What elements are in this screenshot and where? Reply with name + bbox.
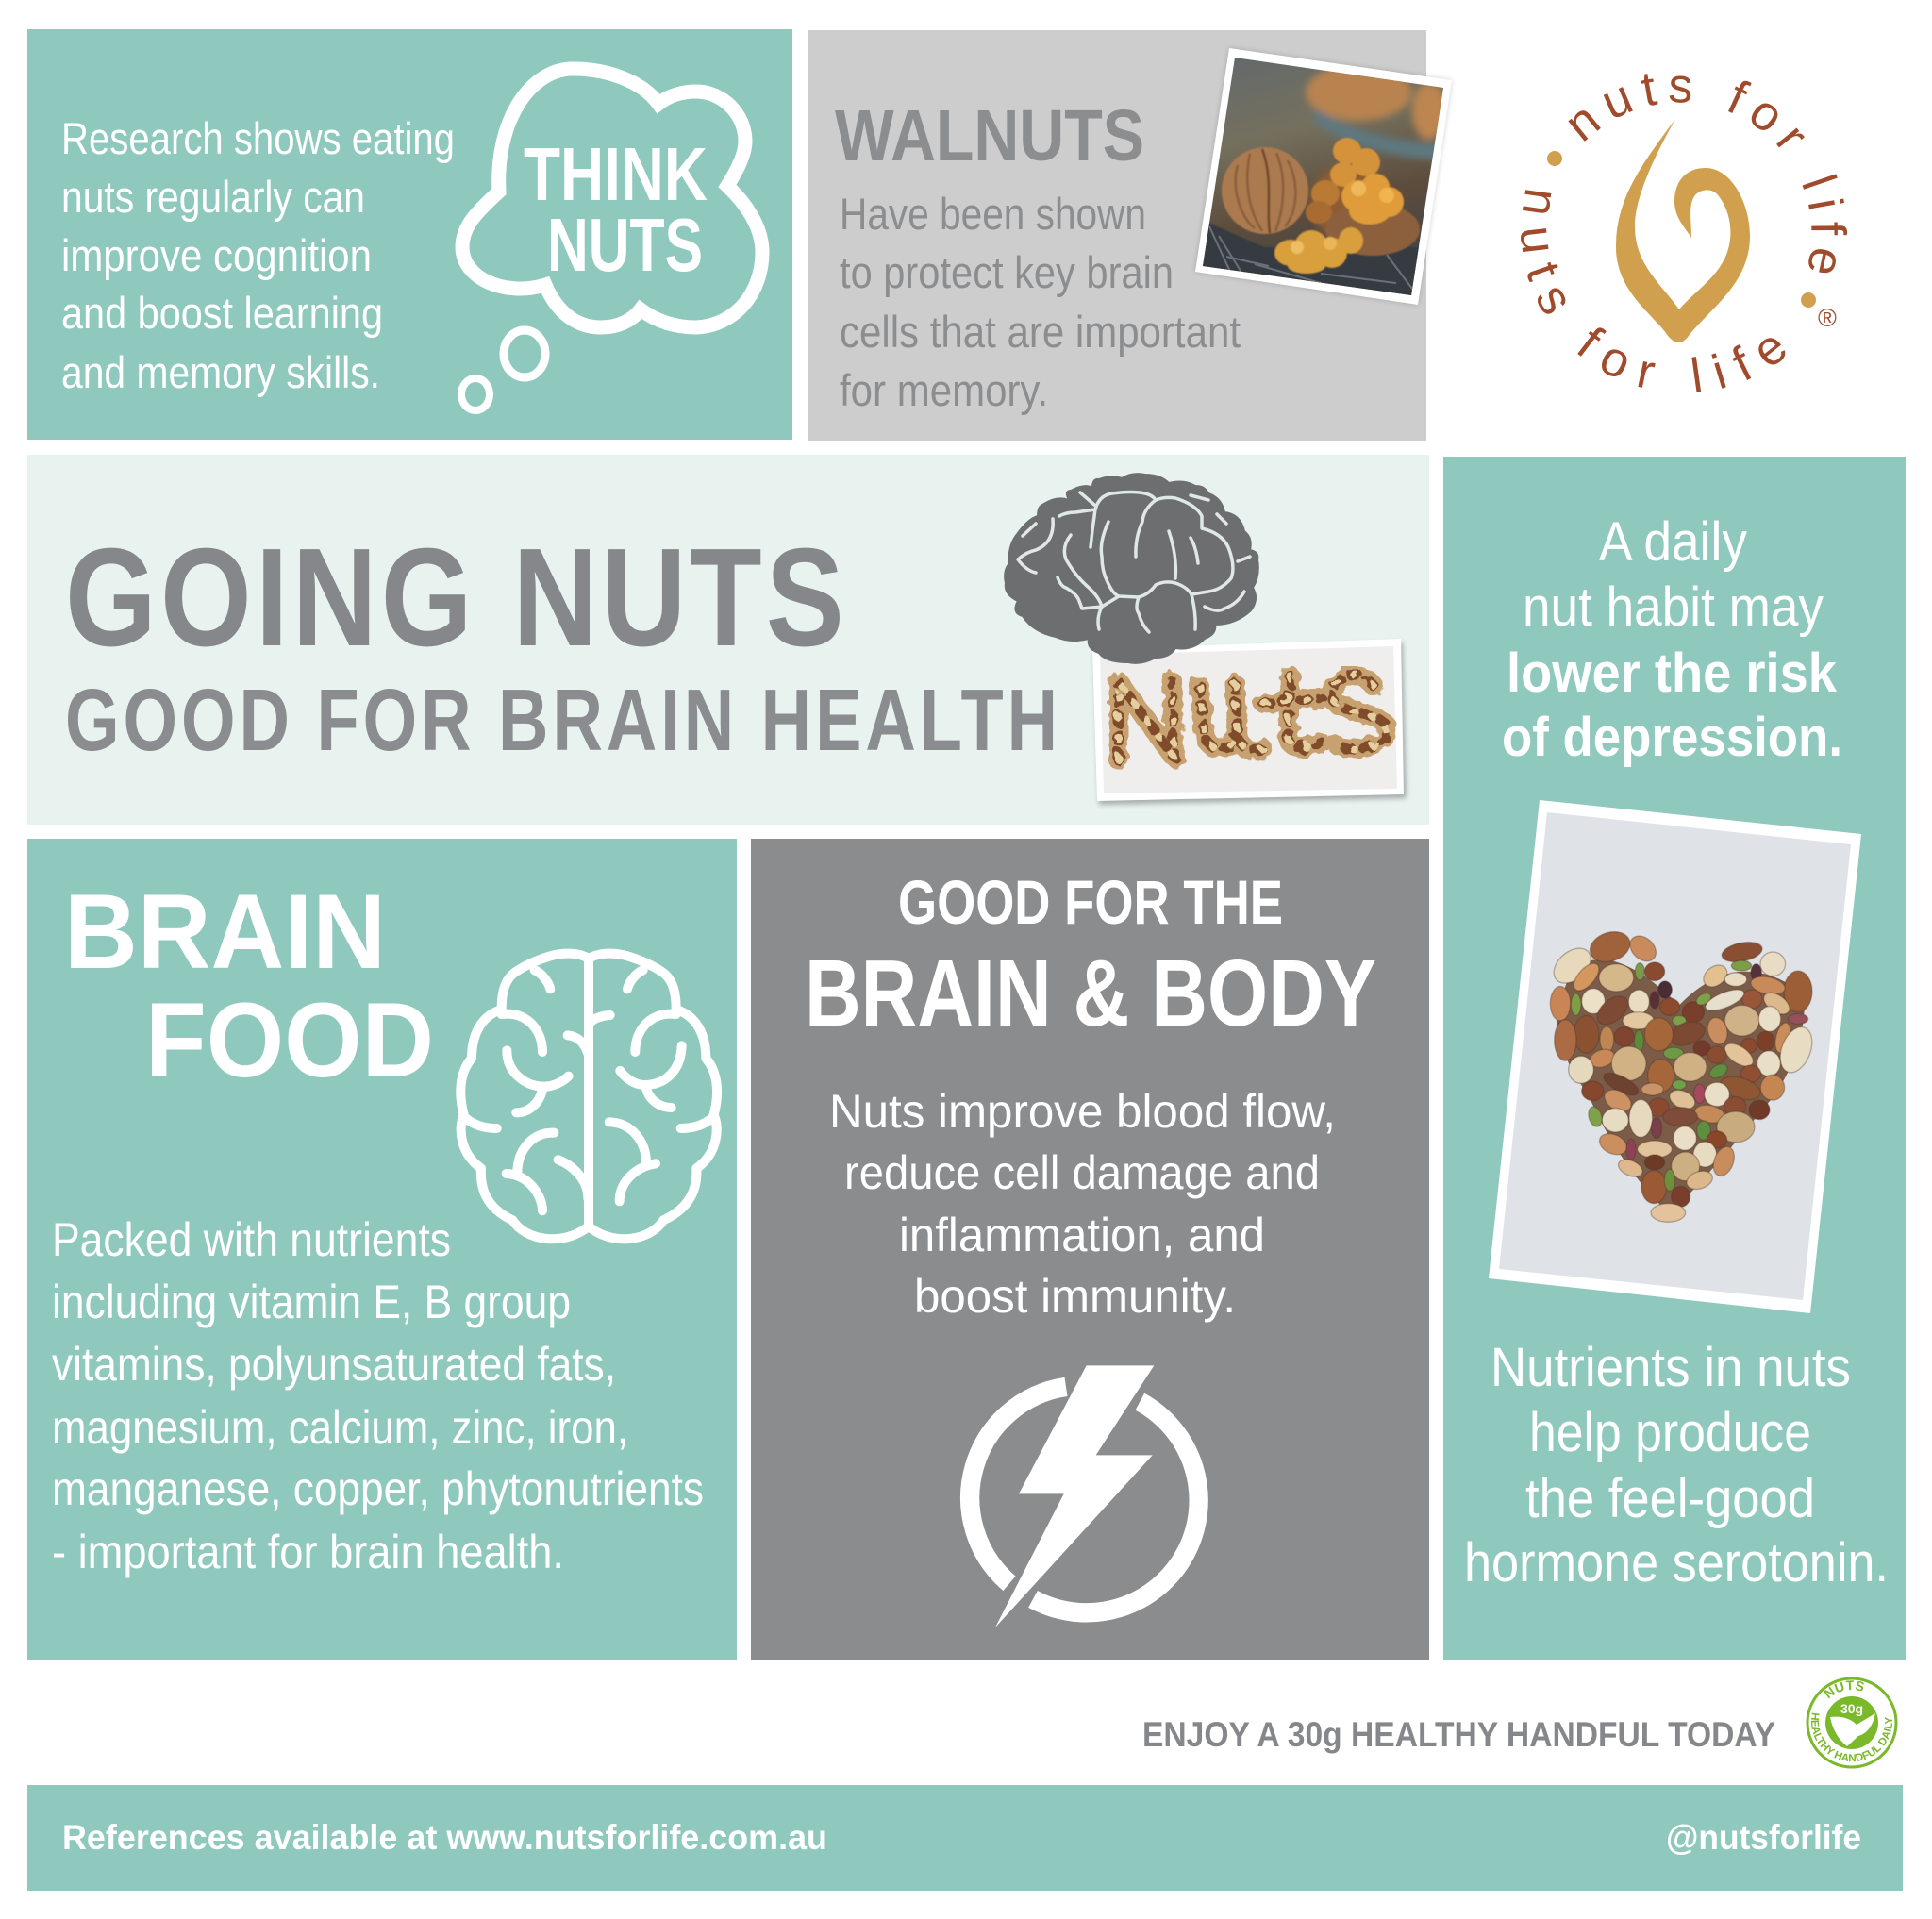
text: walnuts description: to protect key brain [840, 247, 1174, 297]
text: research summary: and memory skills. [61, 347, 380, 397]
text: walnuts description: for memory. [840, 365, 1048, 415]
text: lower the risk of depression: of depression. [1502, 707, 1842, 768]
text: serotonin: hormone serotonin. [1464, 1532, 1889, 1594]
text: lower the risk of depression: A daily [1599, 511, 1747, 573]
icon: thought cloud [461, 69, 762, 410]
heading: brain food [64, 873, 434, 1099]
subheading: good for brain health: GOOD FOR BRAIN HEALTH [65, 671, 1061, 769]
text: nutrient list: manganese, copper, phytonutrients [52, 1462, 704, 1515]
text: walnuts description: cells that are important [840, 307, 1241, 357]
logo dots [1547, 151, 1816, 308]
heading: brain and body: BRAIN & BODY [805, 941, 1376, 1046]
panel: walnuts [808, 30, 1462, 441]
heading: going nuts: GOING NUTS [65, 520, 848, 676]
text: nutrient list: - important for brain health. [52, 1526, 564, 1578]
text: nutrient list: Packed with nutrients [52, 1213, 451, 1266]
heading: think nuts: THINK [524, 132, 708, 216]
panel: think nuts [27, 29, 792, 440]
logo swirl [1616, 119, 1750, 342]
heading: brain food: FOOD [145, 981, 434, 1099]
photo: heart of mixed nuts [1489, 800, 1861, 1313]
text: research summary [61, 113, 455, 397]
text: research summary: and boost learning [61, 288, 383, 338]
badge: 30g healthy handful daily: 30g [1840, 1701, 1863, 1716]
heading: good for the: GOOD FOR THE [898, 867, 1283, 937]
icon: brain outline [460, 954, 717, 1239]
text: research summary: nuts regularly can [61, 172, 365, 222]
text: nutrient list: vitamins, polyunsaturated fats, [52, 1338, 616, 1391]
heading: walnuts: WALNUTS [835, 95, 1144, 176]
text: nutrient list: including vitamin E, B group [52, 1276, 571, 1328]
badge: 30g healthy handful daily: HEALTHY HANDFUL DAILY [1811, 1713, 1892, 1762]
panel: daily nut habit [1443, 457, 1906, 1660]
text: blood flow description [829, 1085, 1336, 1323]
text: research summary: improve cognition [61, 230, 372, 280]
logo: nuts for life [1521, 74, 1847, 392]
text: walnuts description: Have been shown [840, 189, 1146, 239]
heading: think nuts [524, 132, 708, 287]
footer: references: References available at www.nutsforlife.com.au [62, 1818, 827, 1857]
text: serotonin: help produce [1529, 1402, 1811, 1463]
text: blood flow description: Nuts improve blood flow, [829, 1085, 1336, 1138]
text: walnuts description [840, 189, 1241, 415]
badge: 30g healthy handful daily [1806, 1677, 1898, 1768]
footer: social handle: @nutsforlife [1666, 1818, 1861, 1857]
heading: think nuts: NUTS [547, 203, 703, 287]
registered mark: ® [1818, 304, 1837, 332]
text: blood flow description: inflammation, and [899, 1209, 1265, 1261]
text: serotonin: Nutrients in nuts [1491, 1337, 1851, 1398]
panel: brain and body [751, 839, 1429, 1660]
text: blood flow description: reduce cell damage and [844, 1146, 1320, 1199]
panel: going nuts title [27, 455, 1429, 825]
text: nutrient list [52, 1213, 704, 1578]
text: research summary: Research shows eating [61, 113, 455, 163]
footer bar [27, 1785, 1903, 1891]
icon: dark brain [1005, 474, 1258, 663]
text: blood flow description: boost immunity. [914, 1270, 1236, 1323]
logo text: top arc: nuts for life [1568, 74, 1847, 274]
text: lower the risk of depression [1502, 511, 1842, 768]
text: nutrient list: magnesium, calcium, zinc, iron, [52, 1401, 628, 1454]
photo: walnuts [1189, 47, 1462, 311]
photo: nuts spelled out [1092, 639, 1407, 805]
text: serotonin [1464, 1337, 1889, 1594]
text: serotonin: the feel-good [1525, 1468, 1815, 1529]
logo text: bottom arc: nuts for life [1521, 190, 1785, 392]
text: lower the risk of depression: nut habit may [1523, 576, 1824, 638]
panel: brain food [27, 839, 737, 1660]
text: lower the risk of depression: lower the risk [1507, 642, 1838, 704]
tagline: healthy handful: ENJOY A 30g HEALTHY HANDFUL TODAY [1142, 1715, 1775, 1754]
heading: brain food: BRAIN [64, 873, 386, 991]
icon: lightning bolt in circle [970, 1365, 1199, 1627]
badge: 30g healthy handful daily: NUTS [1824, 1680, 1864, 1698]
